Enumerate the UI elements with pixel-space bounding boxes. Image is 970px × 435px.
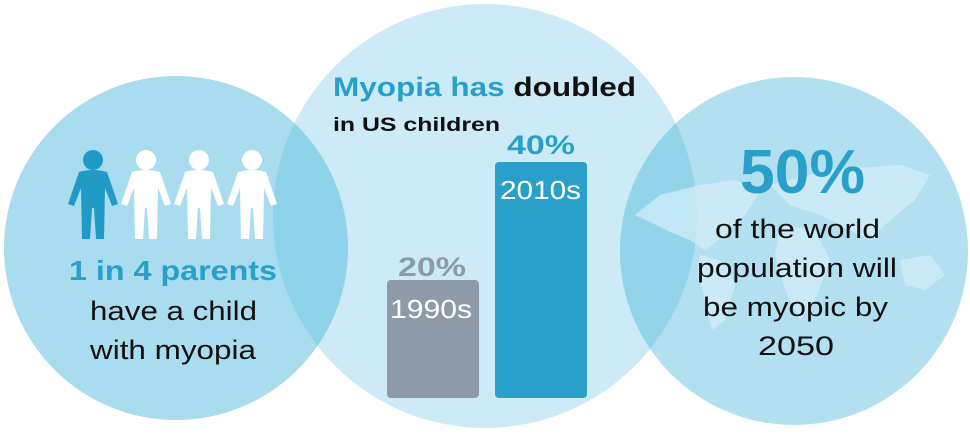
world map	[635, 165, 945, 330]
circle: left	[4, 76, 348, 420]
text: 1 in 4 parents: have a child	[90, 296, 257, 326]
text: 50%: population will	[697, 253, 897, 283]
text: 50%	[697, 138, 897, 361]
text: 50%: 2050	[758, 331, 834, 361]
heading: Myopia has doubled	[333, 72, 636, 136]
overlaps	[273, 124, 695, 349]
circle: middle	[273, 4, 697, 428]
bar chart: 1990s	[390, 294, 472, 324]
bar chart: 20%	[398, 252, 466, 282]
text: 1 in 4 parents	[69, 255, 277, 365]
text: 1 in 4 parents: with myopia	[89, 335, 257, 365]
icon: people	[68, 150, 277, 239]
circle: right	[620, 77, 968, 425]
bar chart	[387, 130, 587, 398]
text: 50%: 50%	[740, 138, 865, 207]
heading: Myopia has doubled: in US children	[333, 115, 500, 136]
heading: Myopia has doubled: Myopia has doubled	[333, 72, 636, 102]
bar chart: 40%	[507, 130, 575, 160]
text: 50%: be myopic by	[703, 292, 889, 322]
text: 1 in 4 parents: 1 in 4 parents	[69, 255, 277, 286]
text: 50%: of the world	[715, 214, 880, 244]
bar chart: 2010s	[500, 175, 581, 205]
